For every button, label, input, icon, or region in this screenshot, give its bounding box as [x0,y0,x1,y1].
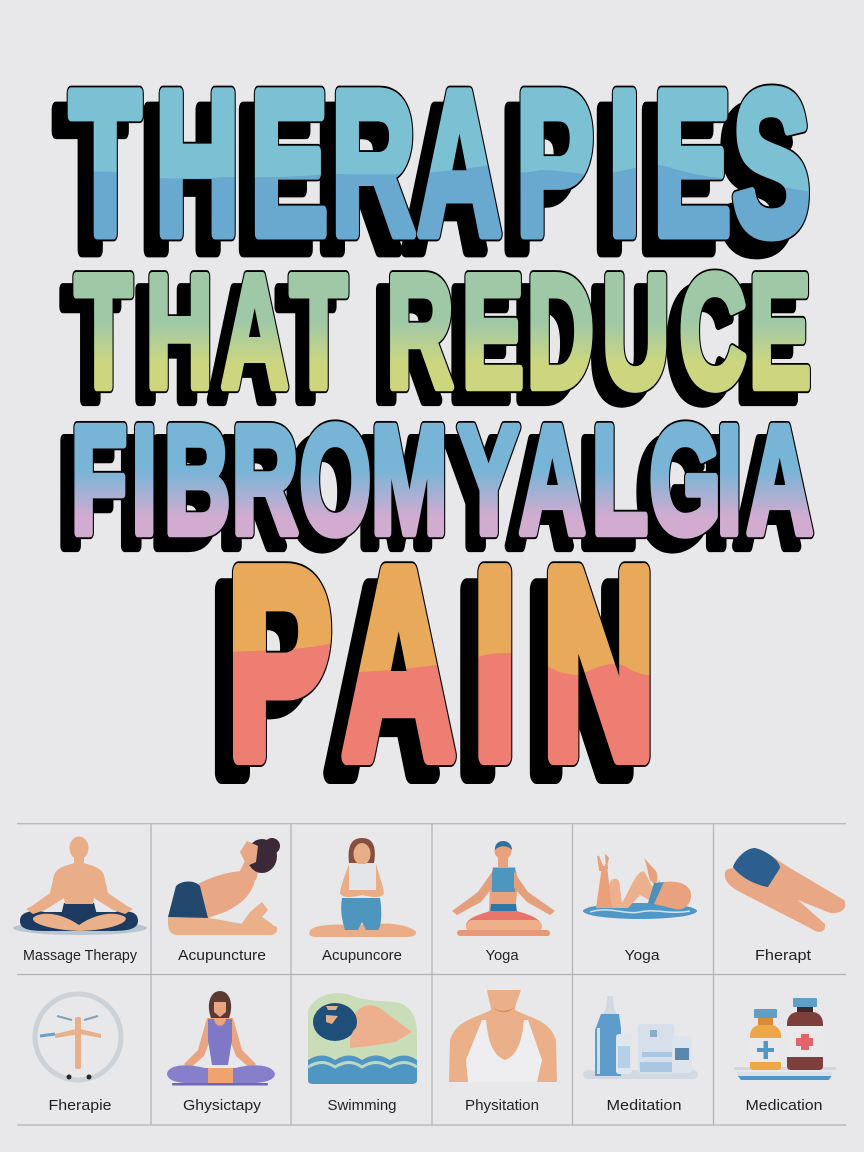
label: Acupuncore: Acupuncore [322,947,402,964]
icon: ghysictapy meditating woman [167,991,275,1086]
title: line 2 THAT REDUCE: THAT REDUCE [75,241,811,421]
title: line 3 FIBROMYALGIA: FIBROMYALGIA [71,394,813,566]
icon: massage therapy seated man [13,836,147,935]
label: Meditation: Meditation [606,1097,682,1114]
icon: fherapt legs [725,848,845,932]
title: line 3 FIBROMYALGIA: FIBROMYALGIA [71,394,813,566]
icon: swimming [308,993,417,1084]
label: Physitation: Physitation [465,1097,539,1114]
label: Ghysictapy: Ghysictapy [183,1097,262,1114]
icon: yoga in water [583,856,697,919]
icon: fherapie needle wheel [35,994,121,1080]
label: Yoga (second): Yoga [624,947,660,964]
grid lines [17,824,846,1125]
label: Massage Therapy: Massage Therapy [23,947,137,964]
icon: physitation shoulders [449,990,557,1082]
icon: medication bottles [734,998,836,1080]
label: Medication: Medication [746,1097,822,1114]
title: line 4 PAIN: PAIN [228,515,655,813]
title: line 1 THERAPIES: THERAPIES [70,50,810,278]
label: Fherapt: Fherapt [755,947,812,964]
label: Yoga (first): Yoga [486,947,519,964]
icon: yoga seated woman [452,841,555,936]
icon: acupuncore kneeling woman [309,838,416,937]
label: Fherapie: Fherapie [48,1097,112,1114]
icon: acupuncture arched man [168,838,280,935]
icon: meditation supplies [583,996,698,1079]
title: line 2 THAT REDUCE: THAT REDUCE [75,241,811,421]
label: Acupuncture: Acupuncture [178,947,266,964]
label: Swimming: Swimming [328,1097,396,1114]
